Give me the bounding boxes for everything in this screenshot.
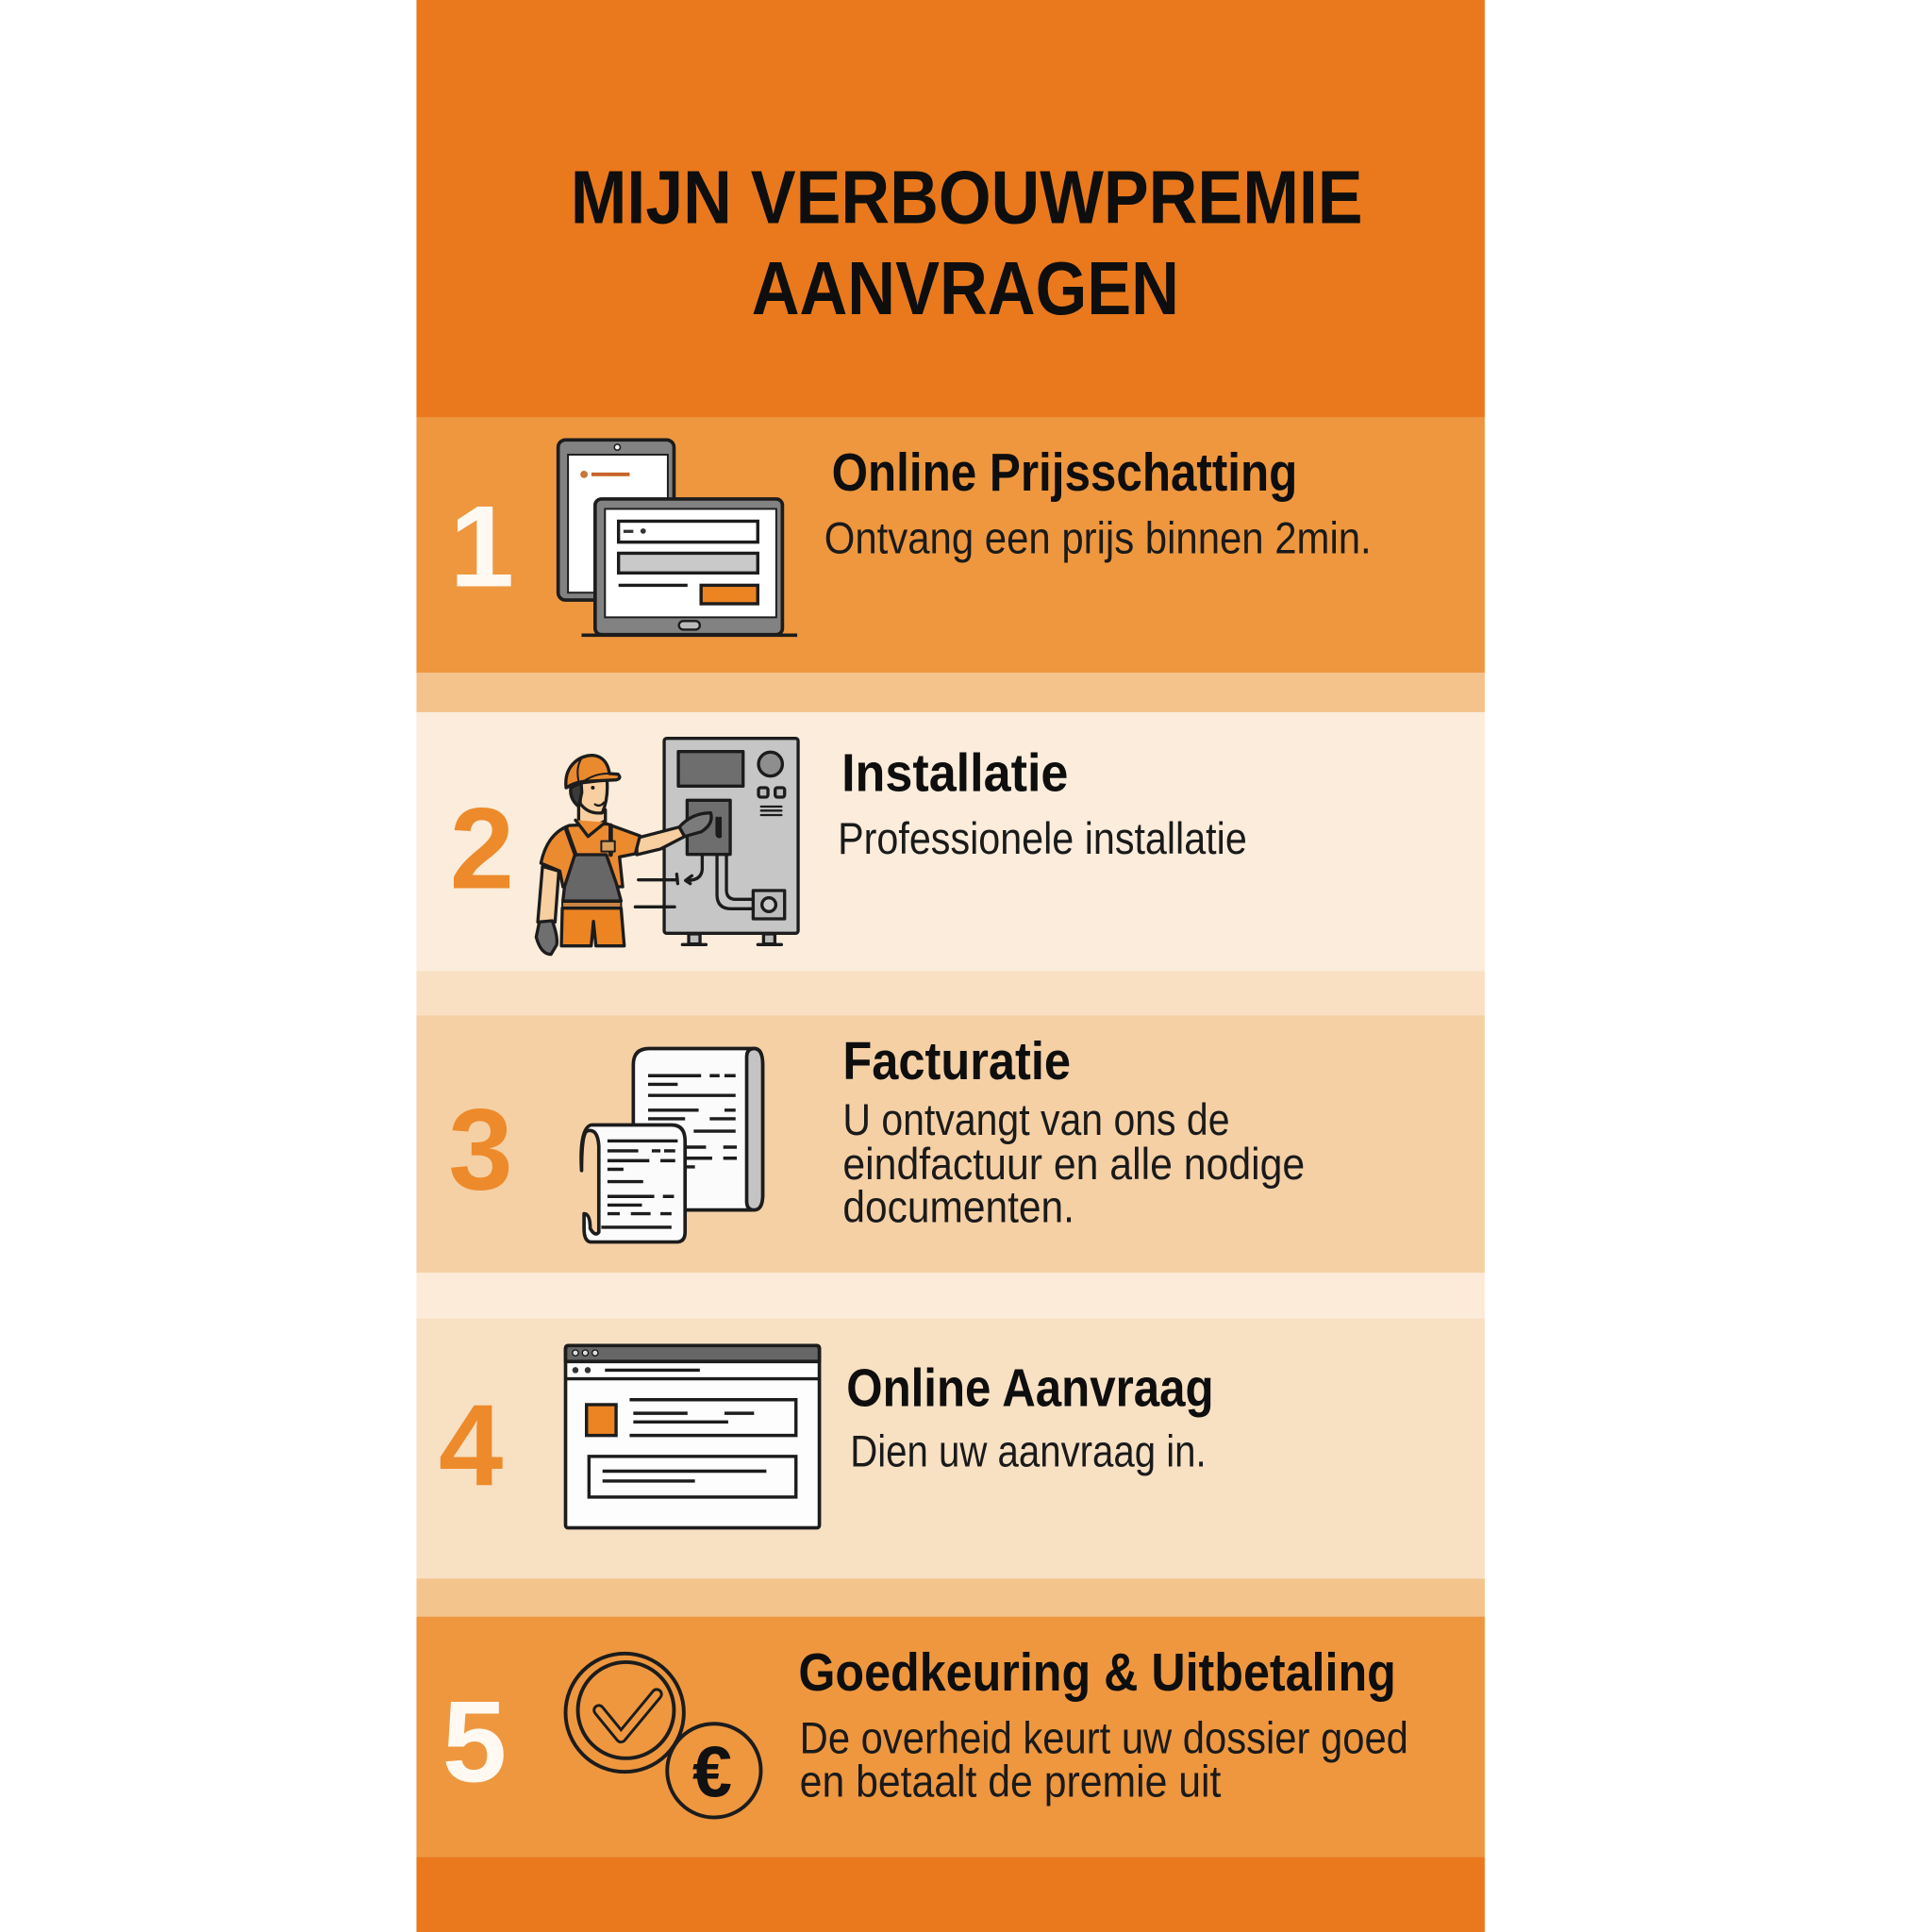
title: AANVRAGEN bbox=[752, 246, 1179, 330]
description: Dien uw aanvraag in. bbox=[850, 1425, 1207, 1475]
step number 5: 5 bbox=[442, 1678, 507, 1807]
step number 3: 3 bbox=[448, 1085, 513, 1214]
icon: tablets with form bbox=[558, 440, 797, 635]
step number 2: 2 bbox=[450, 785, 514, 914]
icon: browser window bbox=[566, 1345, 820, 1528]
heading: Online Aanvraag bbox=[846, 1357, 1214, 1417]
heading: Installatie bbox=[841, 743, 1068, 803]
icon: coins with check and euro: € bbox=[692, 1732, 732, 1812]
title bbox=[571, 155, 1363, 330]
panel: step 1 online prijsschatting bbox=[416, 418, 1485, 673]
panel: step 2 installatie bbox=[416, 712, 1485, 971]
heading: Online Prijsschatting bbox=[832, 442, 1297, 502]
panel: step 4 online aanvraag bbox=[416, 1319, 1485, 1578]
header panel bbox=[416, 0, 1485, 418]
icon: coins with check and euro bbox=[566, 1654, 761, 1818]
heading: Goedkeuring & Uitbetaling bbox=[798, 1642, 1396, 1702]
description: De overheid keurt uw dossier goed bbox=[800, 1713, 1408, 1763]
description bbox=[800, 1713, 1408, 1806]
icon: technician at heat pump bbox=[536, 739, 798, 955]
description: documenten. bbox=[842, 1182, 1074, 1232]
description: Professionele installatie bbox=[838, 813, 1247, 863]
heading: Facturatie bbox=[842, 1031, 1071, 1091]
step number 1: 1 bbox=[450, 483, 514, 612]
description: en betaalt de premie uit bbox=[800, 1756, 1221, 1806]
description: U ontvangt van ons de bbox=[842, 1094, 1230, 1144]
title: MIJN VERBOUWPREMIE bbox=[571, 155, 1363, 239]
step number 4: 4 bbox=[439, 1381, 503, 1510]
description: Ontvang een prijs binnen 2min. bbox=[824, 512, 1372, 562]
footer band bbox=[416, 1857, 1485, 1932]
description: eindfactuur en alle nodige bbox=[842, 1139, 1305, 1189]
description bbox=[842, 1094, 1305, 1232]
panel: step 5 goedkeuring en uitbetaling bbox=[416, 1617, 1485, 1857]
icon: invoice documents bbox=[581, 1049, 762, 1242]
panel: step 3 facturatie bbox=[416, 1015, 1485, 1273]
